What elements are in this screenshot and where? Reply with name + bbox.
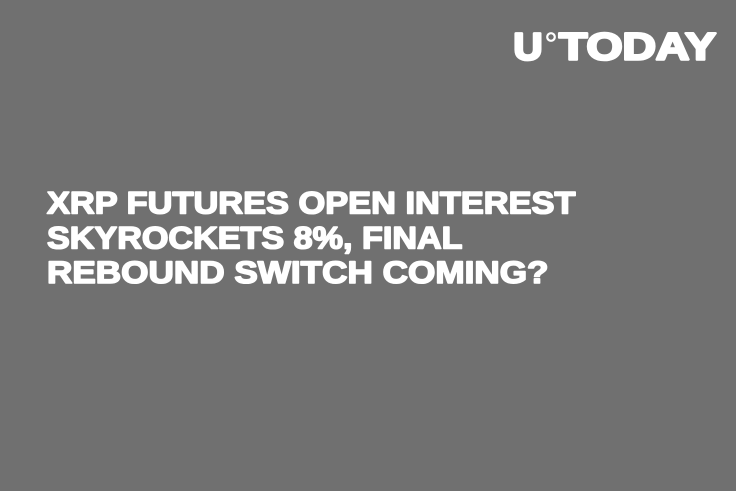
- logo: U.Today: [514, 26, 716, 68]
- logo: U.Today: U: [514, 26, 542, 68]
- title: [47, 184, 576, 290]
- title: REBOUND SWITCH COMING?: [47, 254, 548, 290]
- title: XRP FUTURES OPEN INTEREST: [47, 184, 576, 220]
- title: SKYROCKETS 8%, FINAL: [47, 220, 462, 256]
- logo: U.Today: TODAY: [559, 26, 716, 68]
